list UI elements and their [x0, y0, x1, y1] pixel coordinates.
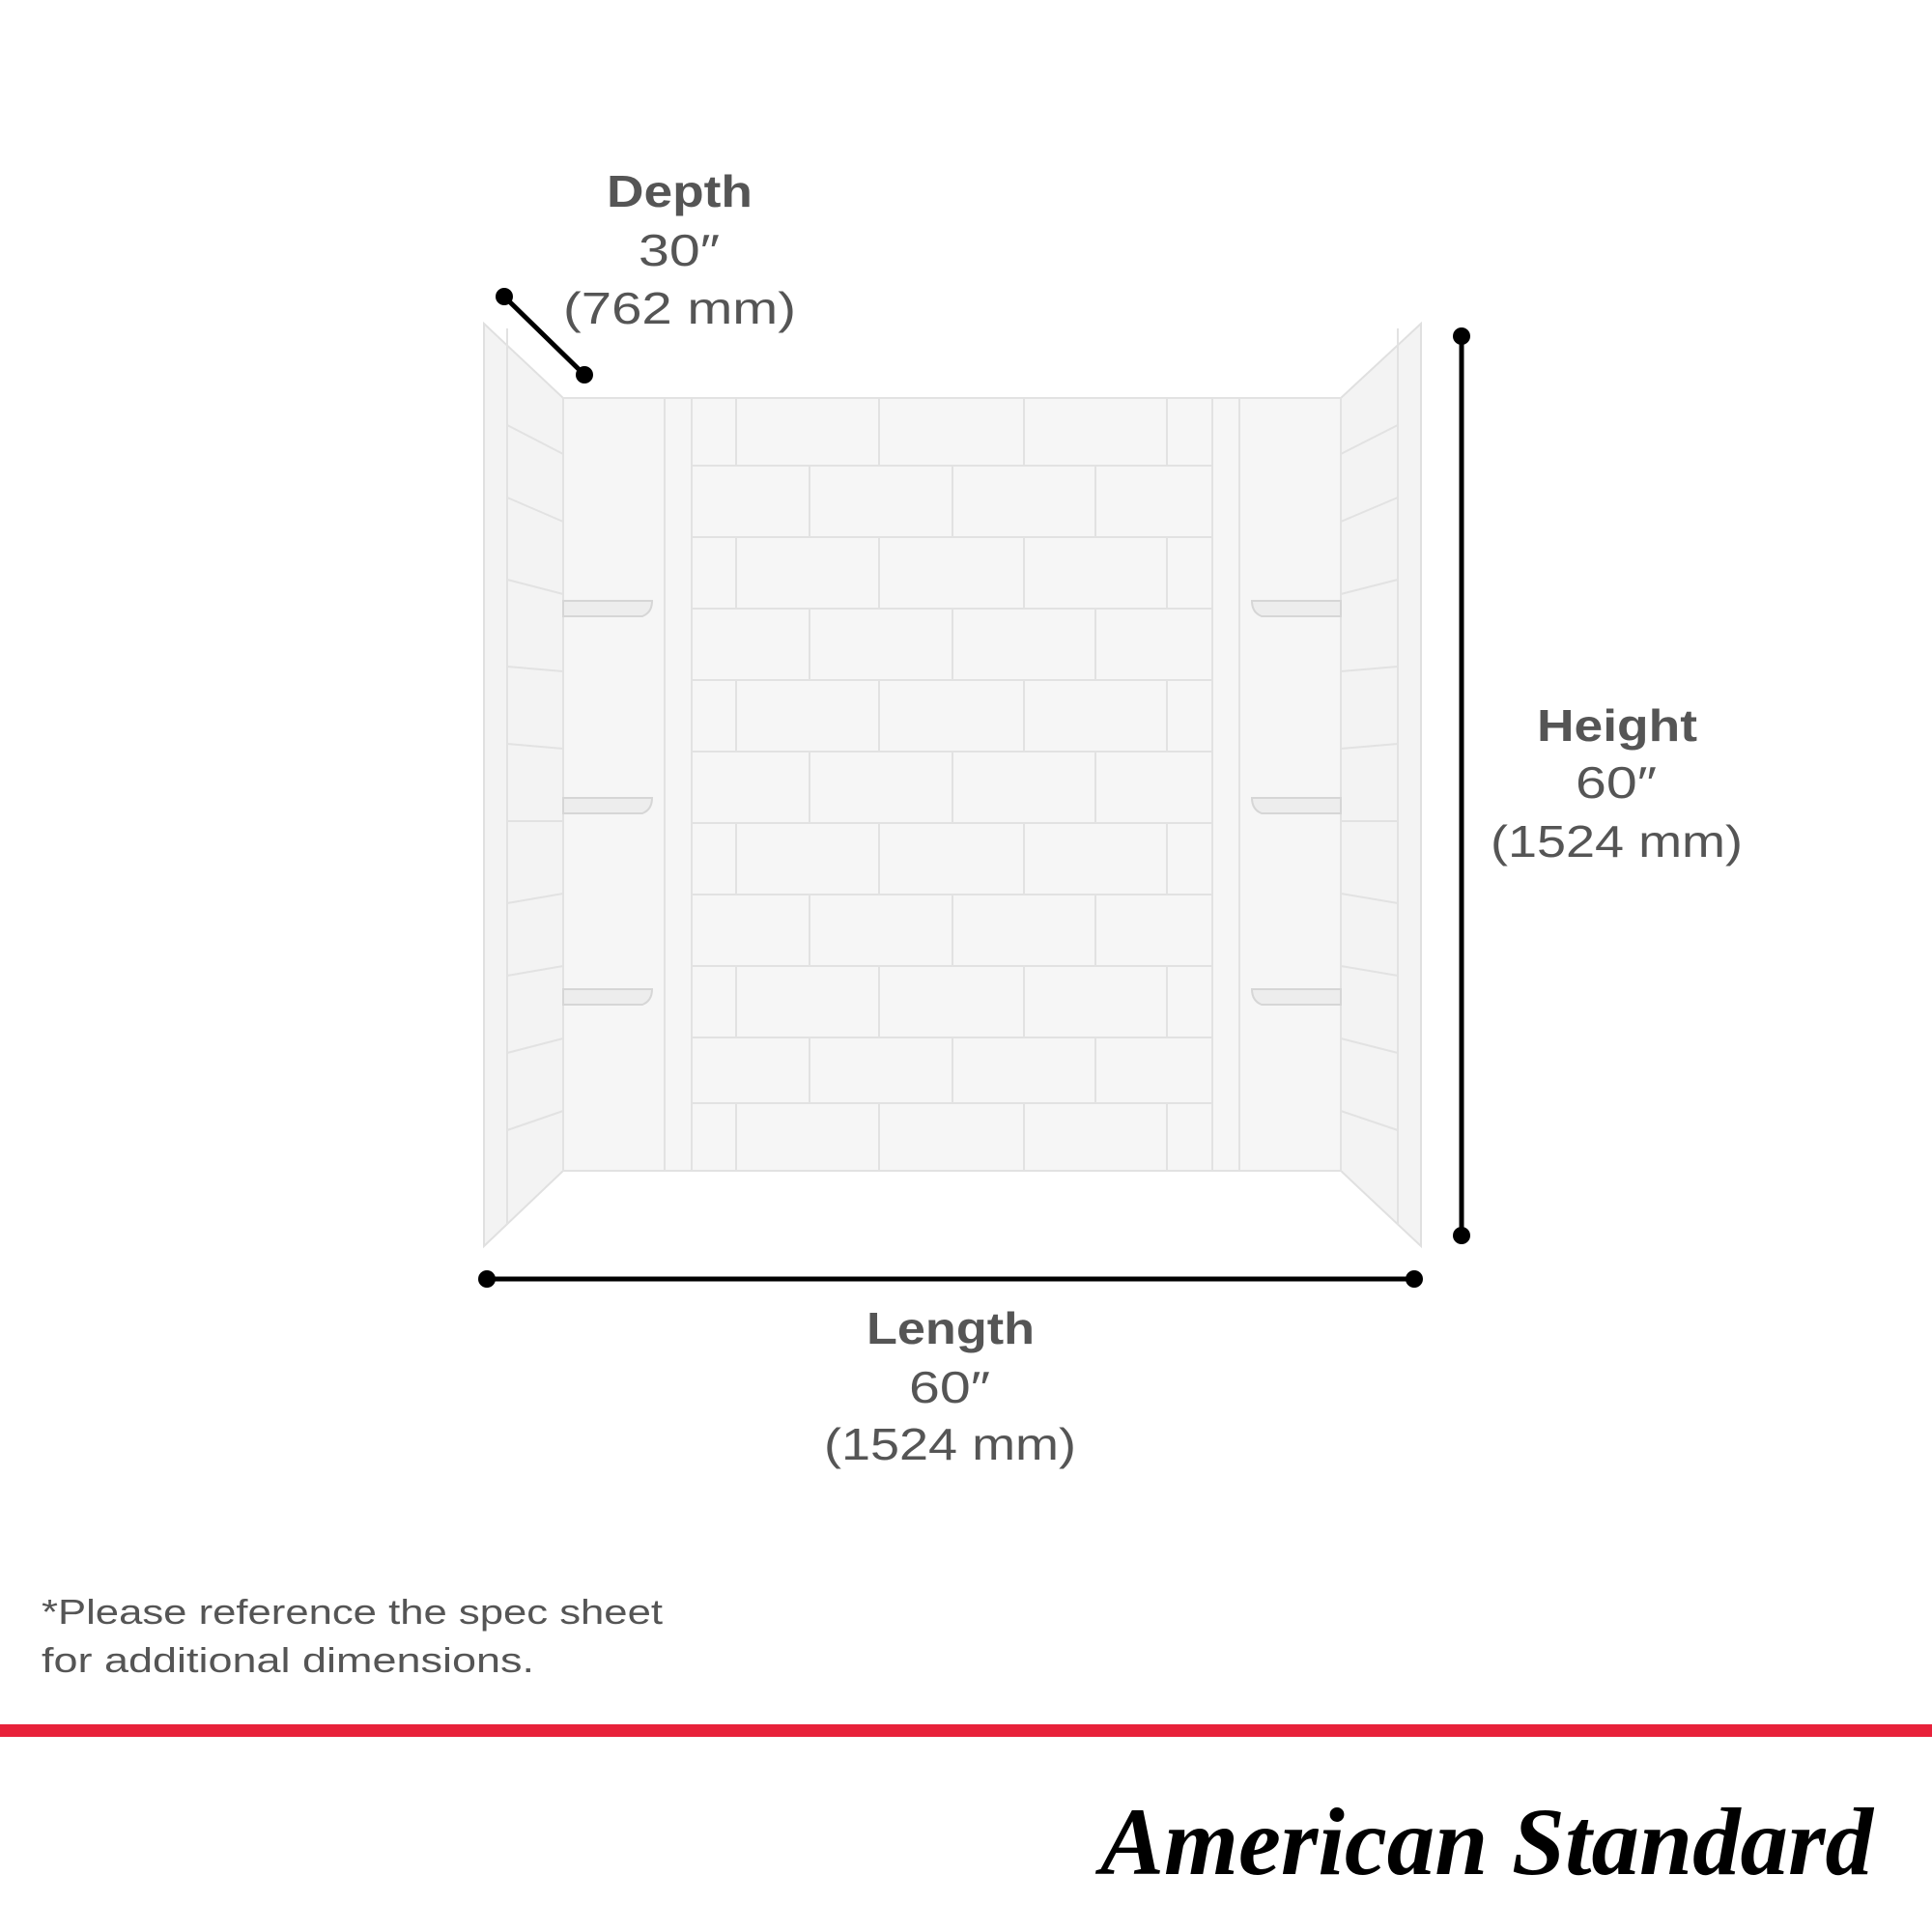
length dimension line: [478, 1270, 1423, 1288]
depth label: Depth: [607, 166, 753, 216]
height label: (1524 mm): [1491, 816, 1743, 867]
length label: [824, 1303, 1076, 1469]
footnote: [42, 1592, 663, 1680]
red divider: [0, 1724, 1932, 1737]
height label: Height: [1537, 700, 1697, 751]
left side panel: [484, 324, 563, 1246]
depth label: [563, 166, 796, 333]
shower surround: [484, 324, 1421, 1246]
right side panel: [1341, 324, 1421, 1246]
depth label: 30″: [639, 225, 720, 275]
length label: (1524 mm): [824, 1419, 1076, 1469]
height label: 60″: [1576, 757, 1657, 808]
footnote: *Please reference the spec sheet: [42, 1592, 663, 1632]
height dimension line: [1453, 327, 1470, 1244]
logo: American Standard: [1094, 1788, 1875, 1895]
length label: Length: [867, 1303, 1035, 1353]
depth label: (762 mm): [563, 283, 796, 333]
height label: [1491, 700, 1743, 867]
back wall: [563, 398, 1341, 1171]
shelves: [563, 601, 1341, 1005]
depth dimension line: [496, 288, 593, 384]
length label: 60″: [909, 1362, 990, 1412]
footnote: for additional dimensions.: [42, 1640, 534, 1680]
